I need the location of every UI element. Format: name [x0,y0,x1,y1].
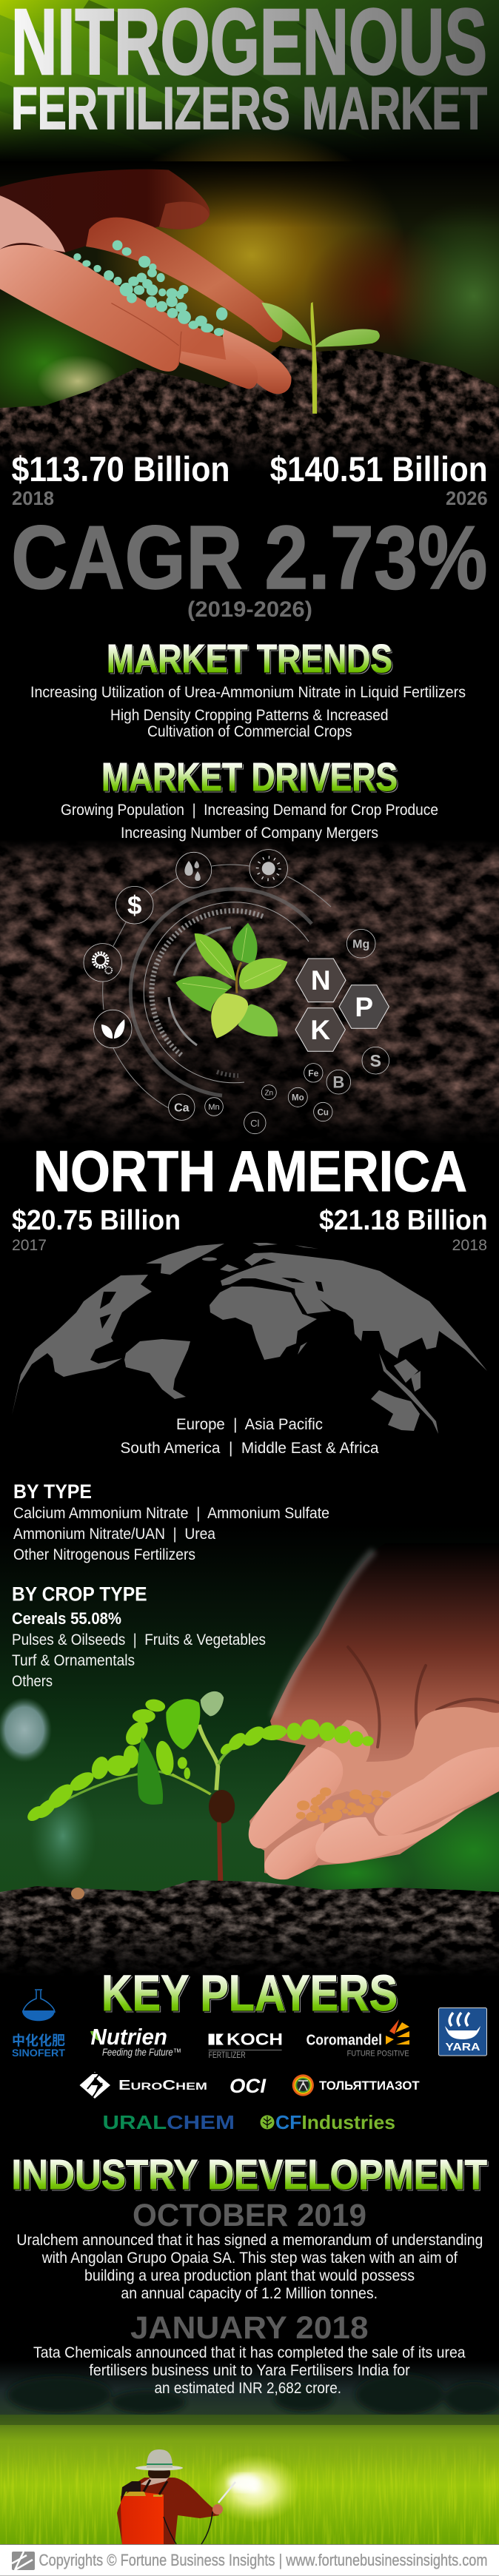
October 2019 development: with Angolan Grupo Opaia SA. This step was taken with an aim of [41,2250,458,2267]
January 2018 development: Tata Chemicals announced that it has completed the sale of its urea [33,2344,466,2361]
October 2019 development: OCTOBER 2019 [133,2198,366,2233]
logo: Nutrien: Nutrien [90,2024,167,2050]
logo: Koch Fertilizer: KOCH [227,2030,283,2049]
January 2018 development [33,2310,466,2397]
market drivers text: Increasing Number of Company Mergers [121,825,378,842]
icon: dollar: $ [127,891,141,920]
logo: Yara [438,2008,487,2056]
farmer spraying [117,2449,301,2544]
logo: CF Industries: CFIndustries [275,2111,395,2133]
heading: key players: KEY PLAYERS [101,1965,398,2022]
logo: Nutrien [90,2024,181,2058]
element: Cu: Cu [318,1109,329,1118]
element: Mg [346,929,375,958]
element: Zn [261,1085,276,1100]
stat: North America 2018: $21.18 Billion [319,1205,488,1236]
element: Zn: Zn [264,1090,273,1097]
world globe map [12,1243,487,1434]
nutrient diagram [84,850,389,1134]
market trends text: Increasing Utilization of Urea-Ammonium Nitrate in Liquid Fertilizers [30,684,466,701]
October 2019 development [16,2198,483,2302]
by crop type list: BY CROP TYPE [12,1583,147,1605]
element: Fe [304,1064,323,1082]
soil mound [0,346,499,481]
icon: water drops [176,852,212,888]
stat: North America 2018: 2018 [452,1237,487,1254]
logo: Sinofert [12,1990,65,2059]
soil strip [0,1880,499,1990]
element: Mo: Mo [292,1094,304,1103]
title [11,0,487,142]
header background: green leaves [0,0,499,167]
logo: OCI: OCI [230,2075,266,2097]
by crop type list: Pulses & Oilseeds | Fruits & Vegetables [12,1631,266,1648]
stat: 2026 market size [270,449,488,509]
element: B [326,1070,351,1094]
logo: Togliattiazot: ТОЛЬЯТТИАЗОТ [319,2079,420,2093]
logo: Togliattiazot [292,2074,420,2096]
icon: sun [250,850,287,888]
hexagon P [339,985,389,1028]
by type list: Calcium Ammonium Nitrate | Ammonium Sulfate [13,1505,329,1522]
logo: Coromandel: FUTURE POSITIVE [347,2049,409,2058]
stat: North America 2018 [319,1205,488,1254]
logo: Coromandel [307,2019,409,2058]
regions list [120,1416,379,1457]
market drivers text: Growing Population | Increasing Demand for Crop Produce [61,802,438,819]
hero photo: hand dropping fertilizer pellets over sprout [0,130,499,486]
element: Mg: Mg [352,939,369,950]
October 2019 development: building a urea production plant that would possess [84,2267,415,2284]
element: Mn: Mn [208,1103,220,1112]
market trends text [30,684,466,740]
hexagon N [296,959,346,1002]
hand with orange pellets [249,1543,499,1879]
icon: dollar [115,886,153,924]
hexagon P: P [355,992,373,1022]
stat: North America 2017: 2017 [12,1237,47,1254]
by crop type list: Cereals 55.08% [12,1609,121,1628]
hand [0,170,291,394]
element: Cu [314,1102,332,1121]
by type list: Ammonium Nitrate/UAN | Urea [13,1526,215,1543]
market drivers text [61,802,438,842]
January 2018 development: an estimated INR 2,682 crore. [154,2380,341,2397]
hexagon K: K [310,1015,330,1045]
heading: market drivers: MARKET DRIVERS [101,755,398,799]
stat: North America 2017: $20.75 Billion [12,1205,181,1236]
logo: Koch Fertilizer: FERTILIZER [209,2050,246,2060]
CAGR figure: (2019-2026) [187,597,312,622]
element: Cl [244,1112,266,1134]
hexagon K [295,1008,345,1051]
logo: Koch Fertilizer [209,2030,283,2060]
hexagon N: N [311,965,331,996]
element: Mo [288,1087,307,1107]
crop photo background [0,1525,499,1925]
logo: Sinofert: SINOFERT [12,2047,65,2059]
January 2018 development: JANUARY 2018 [130,2310,369,2346]
soil photo background [0,840,499,1173]
logo: Uralchem: URAL CHEM [102,2111,235,2133]
orbit connectors [103,865,331,1108]
footer [0,2545,499,2576]
by crop type list [12,1583,266,1690]
logo: EuroChem: E URO C HEM [118,2078,207,2093]
element: Cl: Cl [250,1118,260,1129]
logo: Yara: YARA [446,2041,480,2053]
by crop type list: Others [12,1673,53,1690]
element: S: S [370,1051,381,1070]
icon: gears [84,944,121,982]
by crop type list: Turf & Ornamentals [12,1652,135,1669]
sprout [261,302,380,414]
field photo: sky and grass [0,2361,499,2544]
plant [175,923,287,1039]
element: S [362,1047,389,1074]
stat: 2018 market size [12,449,230,509]
heading: market trends: MARKET TRENDS [107,637,392,681]
element: Ca [169,1094,195,1120]
logo: Coromandel: Coromandel [307,2033,382,2049]
by type list [13,1480,329,1563]
regions list: Europe | Asia Pacific [176,1416,323,1433]
logo: Nutrien: Feeding the Future™ [102,2046,181,2058]
stat: 2018 market size: $113.70 Billion [12,449,230,489]
element: B: B [332,1073,344,1091]
footer logo [12,2552,35,2570]
element: Mn [205,1098,223,1116]
by type list: Other Nitrogenous Fertilizers [13,1546,195,1563]
market trends text: Cultivation of Commercial Crops [147,723,352,740]
January 2018 development: fertilisers business unit to Yara Fertilisers India for [89,2362,410,2379]
element: Ca: Ca [174,1101,190,1115]
stat: 2026 market size: 2026 [446,487,488,509]
young plant with seed [24,1691,374,1891]
logo: Sinofert: 中化化肥 [12,2033,65,2048]
stat: 2018 market size: 2018 [12,487,54,509]
market trends text: High Density Cropping Patterns & Increased [110,707,388,724]
stat: North America 2017 [12,1205,181,1254]
by type list: BY TYPE [13,1480,92,1503]
concentric rings [130,889,312,1096]
October 2019 development: an annual capacity of 1.2 Million tonnes. [121,2285,378,2302]
logo: EuroChem [80,2072,207,2099]
element: Fe: Fe [308,1068,319,1079]
regions list: South America | Middle East & Africa [120,1440,379,1457]
icon: leaves [94,1010,132,1048]
